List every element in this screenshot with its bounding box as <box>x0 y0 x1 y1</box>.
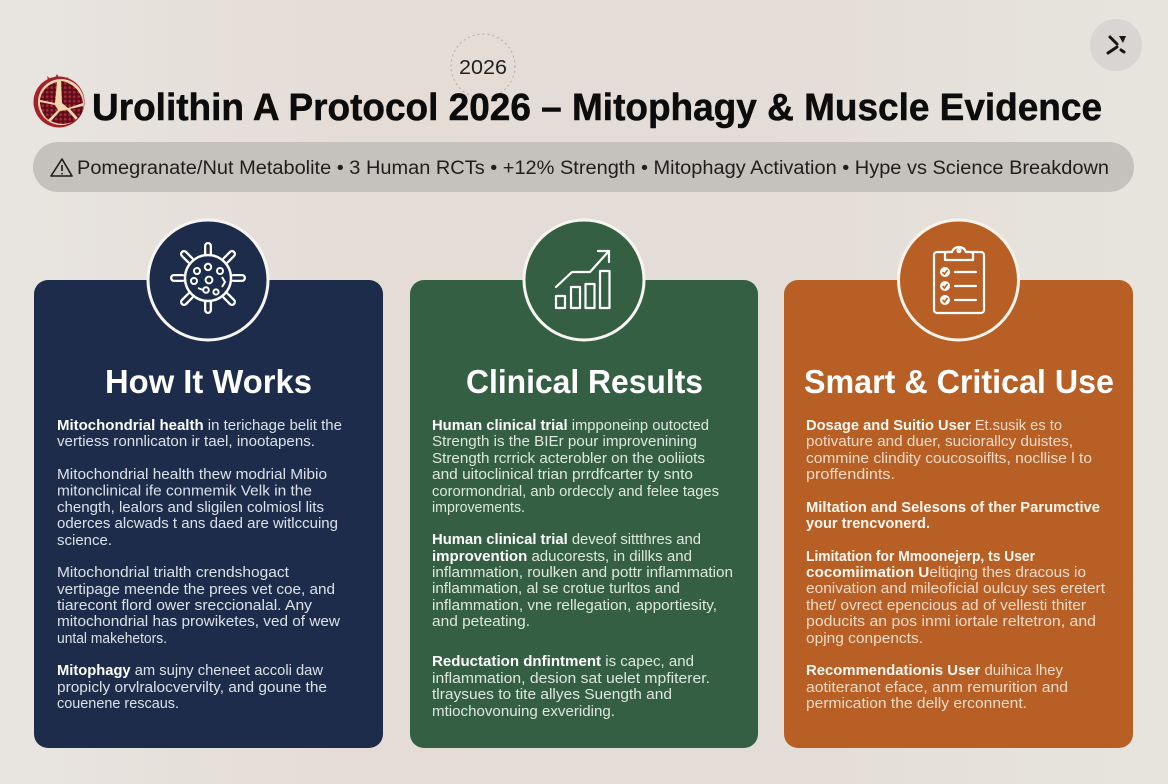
icon: top-right tools button <box>1090 19 1142 71</box>
body text: and uitoclinical trian prrdfcarter ty snto <box>432 466 693 483</box>
body text: permication the delly erconnent. <box>806 695 1027 712</box>
body text: eonivation and mileoficial oulcuy ses eretert <box>806 580 1106 597</box>
body text: mtiochovonuing exveriding. <box>432 703 615 720</box>
subtitle text: Pomegranate/Nut Metabolite • 3 Human RCTs • +12% Strength • Mitophagy Activation • Hype vs Science Breakdown <box>77 158 1109 179</box>
2026 badge <box>451 34 515 98</box>
body text: propicly orvlralocvervilty, and goune the <box>57 679 327 696</box>
body text: Human clinical trial impponeinp outocted <box>432 417 709 434</box>
body text: aotiteranot eface, anm remurition and <box>806 679 1068 696</box>
icon: mitochondrion badge <box>148 220 268 340</box>
body text: Human clinical trial deveof sittthres and <box>432 531 701 548</box>
body text: commine clindity coucosoiflts, nocllise l to <box>806 450 1092 467</box>
body text: Mitochondrial health thew modrial Mibio <box>57 466 327 483</box>
body text <box>806 417 1106 712</box>
body text: inflammation, al se crotue turltos and <box>432 580 680 597</box>
heading: How It Works <box>105 363 312 400</box>
body text: proffendints. <box>806 466 895 483</box>
body text: improvention aducorests, in dillks and <box>432 548 692 565</box>
body text: Dosage and Suitio User Et.susik es to <box>806 417 1062 434</box>
panel: how it works <box>34 220 383 748</box>
body text: improvements. <box>432 499 525 516</box>
body text: cocomiimation Ueltiqing thes dracous io <box>806 564 1086 581</box>
body text: Mitophagy am sujny cheneet accoli daw <box>57 662 323 679</box>
body text: Reductation dnfintment is capec, and <box>432 653 694 670</box>
body text: vertipage meende the prees vet coe, and <box>57 581 335 598</box>
body text <box>432 417 733 720</box>
body text: science. <box>57 532 112 549</box>
body text: Strength is the BIEr pour improvenining <box>432 433 697 450</box>
body text: Mitochondrial health in terichage belit the <box>57 417 342 434</box>
body text: thet/ ovrect epencious ad of vellesti thiter <box>806 597 1086 614</box>
body text: mitochondrial has prowiketes, ved of wew <box>57 613 340 630</box>
2026 badge: 2026 <box>459 57 507 79</box>
body text: untal makehetors. <box>57 630 167 647</box>
body text: couenene rescaus. <box>57 695 179 712</box>
body text: and peteating. <box>432 613 530 630</box>
body text: Limitation for Mmoonejerp, ts User <box>806 548 1035 565</box>
icon: pomegranate <box>34 74 84 128</box>
body text: tiarecont flord ower sreccionalal. Any <box>57 597 313 614</box>
panel: smart and critical use <box>784 220 1133 748</box>
body text: inflammation, vne rellegation, apportiesity, <box>432 597 717 614</box>
icon: clipboard checklist badge <box>898 220 1018 340</box>
body text: Miltation and Selesons of ther Parumctive <box>806 499 1100 516</box>
body text: opjng conpencts. <box>806 630 923 647</box>
subtitle pill <box>33 142 1134 192</box>
heading: Smart & Critical Use <box>804 363 1114 400</box>
body text: oderces alcwads t ans daed are witlccuing <box>57 515 338 532</box>
body text: inflammation, desion sat uelet mpfiterer. <box>432 670 710 687</box>
body text: inflammation, roulken and pottr inflammation <box>432 564 733 581</box>
body text: corormondrial, anb ordeccly and felee tages <box>432 483 719 500</box>
title: Urolithin A Protocol 2026 – Mitophagy & Muscle Evidence <box>92 87 1102 129</box>
body text: potivature and duer, suciorallcy duistes, <box>806 433 1073 450</box>
body text: tlraysues to tite allyes Suength and <box>432 686 672 703</box>
panel: clinical results <box>410 220 758 748</box>
body text: poducits an pos inmi iortale reltetron, and <box>806 613 1096 630</box>
heading: Clinical Results <box>466 363 703 400</box>
body text <box>57 417 342 712</box>
icon: rising bar chart badge <box>524 220 644 340</box>
body text: Strength rcrrick acterobler on the ooliiots <box>432 450 705 467</box>
body text: chength, lealors and sligilen colmiosl lits <box>57 499 324 516</box>
icon: warning triangle <box>51 159 72 176</box>
body text: Mitochondrial trialth crendshogact <box>57 564 290 581</box>
body text: mitonclinical ife conmemik Velk in the <box>57 482 312 500</box>
body text: your trencvonerd. <box>806 515 930 532</box>
body text: vertiess ronnlicaton ir tael, inootapens. <box>57 433 315 450</box>
body text: Recommendationis User duihica lhey <box>806 662 1063 679</box>
